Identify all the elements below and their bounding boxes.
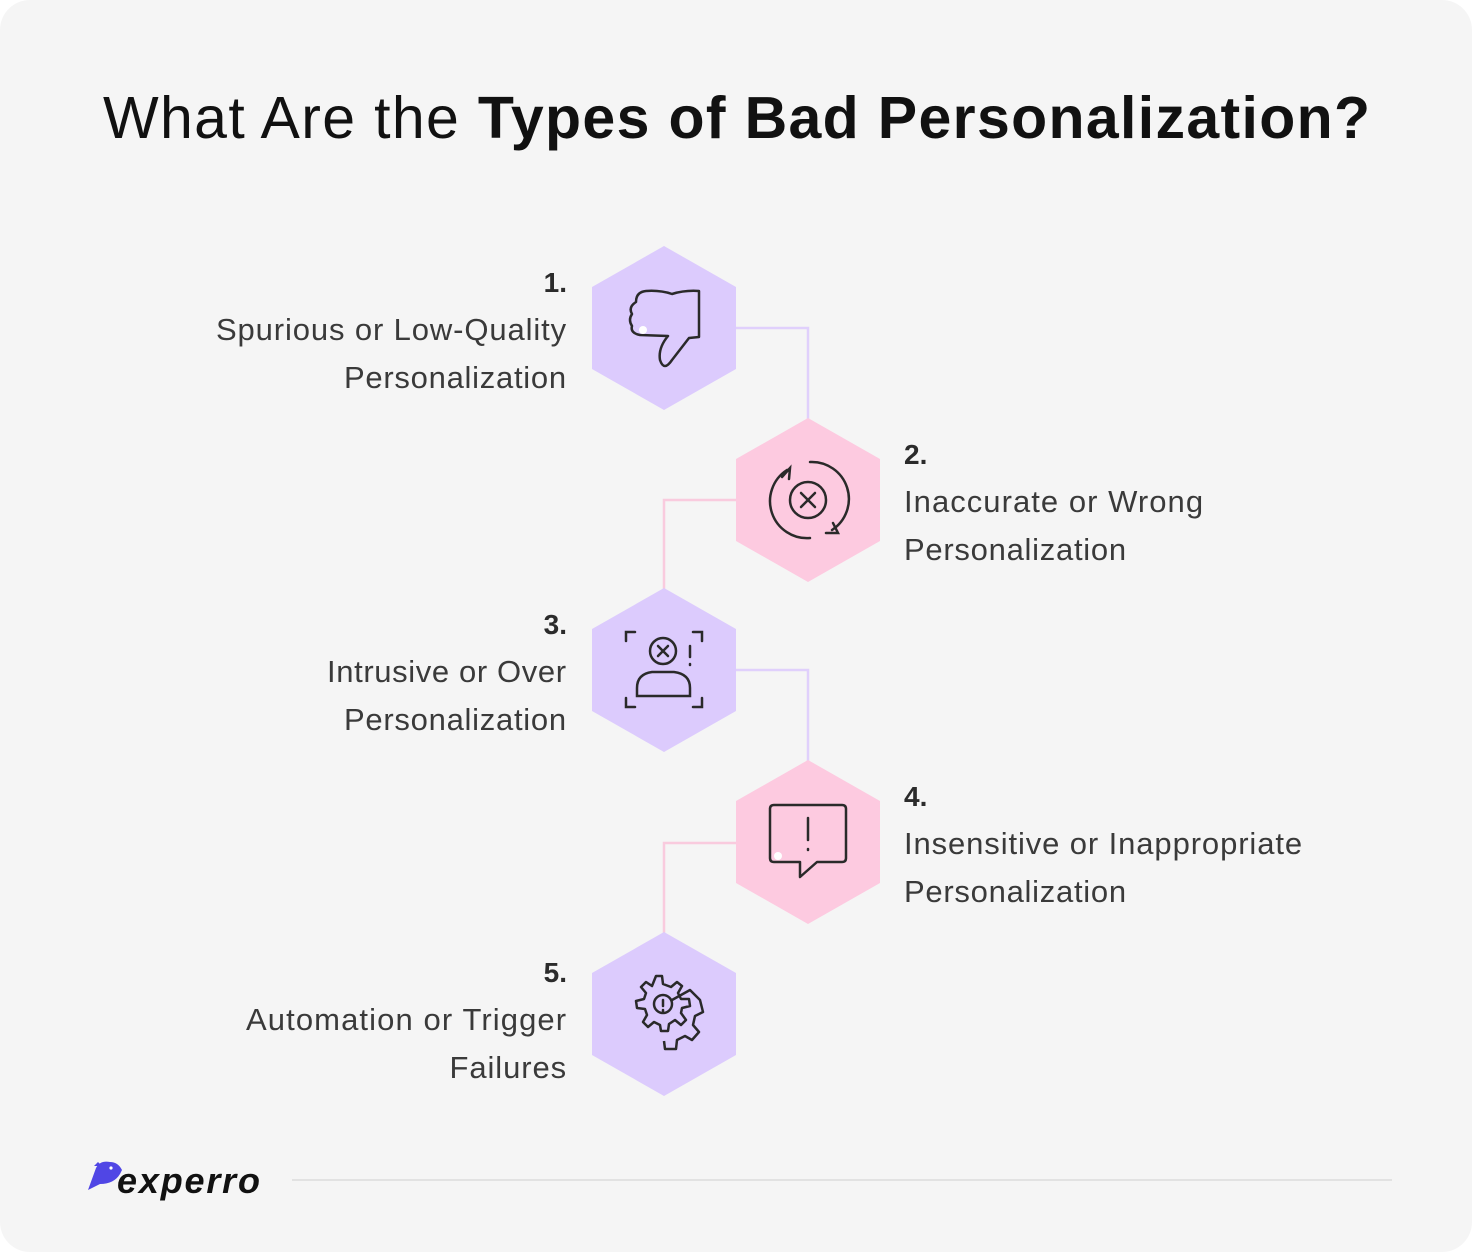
title: What Are the Types of Bad Personalization? [103,85,1370,151]
item 1 text: Personalization [344,360,567,395]
item 2 text: Personalization [904,532,1127,567]
item 3 text: Personalization [344,702,567,737]
item 3 text [327,609,567,737]
item 5 text: 5. [544,957,567,988]
hexagon 2 with refresh-x icon [736,418,880,582]
item 2 text: Inaccurate or Wrong [904,484,1204,519]
hexagon 3 with person alert icon [592,588,736,752]
item 4 text: 4. [904,781,927,812]
item 5 text: Failures [450,1050,567,1085]
item 5 text: Automation or Trigger [246,1002,567,1037]
item 1 text: 1. [544,267,567,298]
item 1 text [216,267,567,395]
connectors [664,328,808,934]
item 2 text: 2. [904,439,927,470]
item 5 text [246,957,567,1085]
item 3 text: Intrusive or Over [327,654,567,689]
hexagon 5 with gear failure icon [592,932,736,1096]
footer line [292,1179,1392,1181]
item 4 text: Insensitive or Inappropriate [904,826,1303,861]
hexagon 1 with thumbs down icon [592,246,736,410]
hexagon 4 with speech bubble alert icon [736,760,880,924]
item 2 text [904,439,1204,567]
logo: experro [117,1160,260,1201]
item 1 text: Spurious or Low-Quality [216,312,567,347]
item 3 text: 3. [544,609,567,640]
item 4 text [904,781,1303,909]
item 4 text: Personalization [904,874,1127,909]
